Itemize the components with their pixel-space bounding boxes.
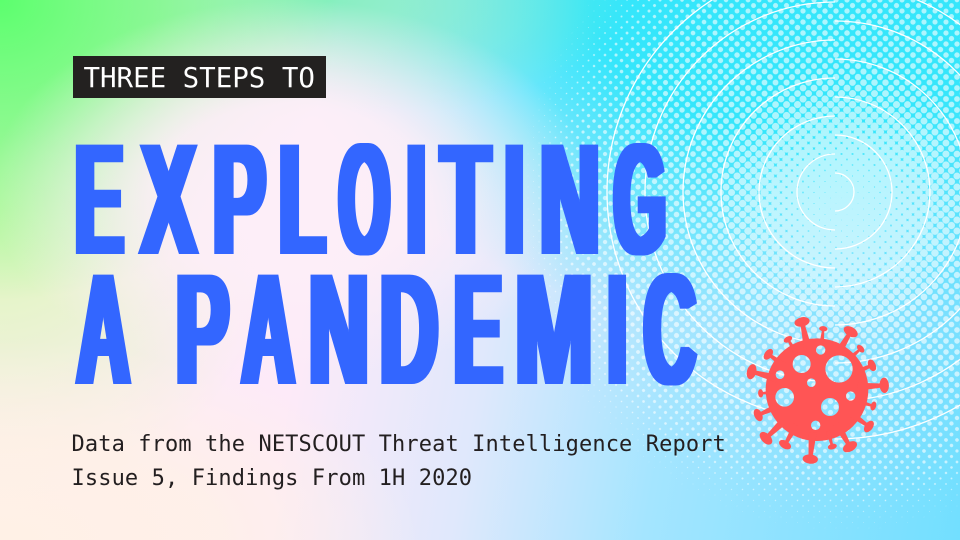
concentric broken rings xyxy=(607,0,960,439)
title: exploiting a pandemic: C xyxy=(644,240,696,418)
badge: three steps to: THREE STEPS TO xyxy=(84,62,315,94)
title: exploiting a pandemic: G xyxy=(614,110,666,288)
title: exploiting a pandemic: D xyxy=(380,240,438,418)
title: exploiting a pandemic: I xyxy=(608,240,626,418)
title: exploiting a pandemic: L xyxy=(279,110,326,288)
title: exploiting a pandemic: M xyxy=(515,240,593,418)
title: exploiting a pandemic: P xyxy=(213,110,266,288)
title: exploiting a pandemic: N xyxy=(540,110,600,288)
title: exploiting a pandemic: A xyxy=(77,240,129,418)
subtitle line 1: Data from the NETSCOUT Threat Intelligence Report xyxy=(72,432,726,457)
title: exploiting a pandemic: P xyxy=(176,240,229,418)
subtitle line 2: Issue 5, Findings From 1H 2020 xyxy=(72,466,472,491)
title: exploiting a pandemic: I xyxy=(505,110,524,288)
title: exploiting a pandemic: N xyxy=(309,240,368,418)
title: exploiting a pandemic: O xyxy=(339,110,390,288)
title: exploiting a pandemic: E xyxy=(454,240,502,418)
badge: three steps to xyxy=(73,56,326,98)
title: exploiting a pandemic: X xyxy=(141,110,197,288)
title: exploiting a pandemic: E xyxy=(75,110,124,288)
title: exploiting a pandemic: T xyxy=(441,110,490,288)
title: exploiting a pandemic: A xyxy=(242,240,294,418)
illustration: rings and virus xyxy=(606,0,960,464)
icon: red virus xyxy=(745,316,889,464)
title: exploiting a pandemic: I xyxy=(407,110,425,288)
